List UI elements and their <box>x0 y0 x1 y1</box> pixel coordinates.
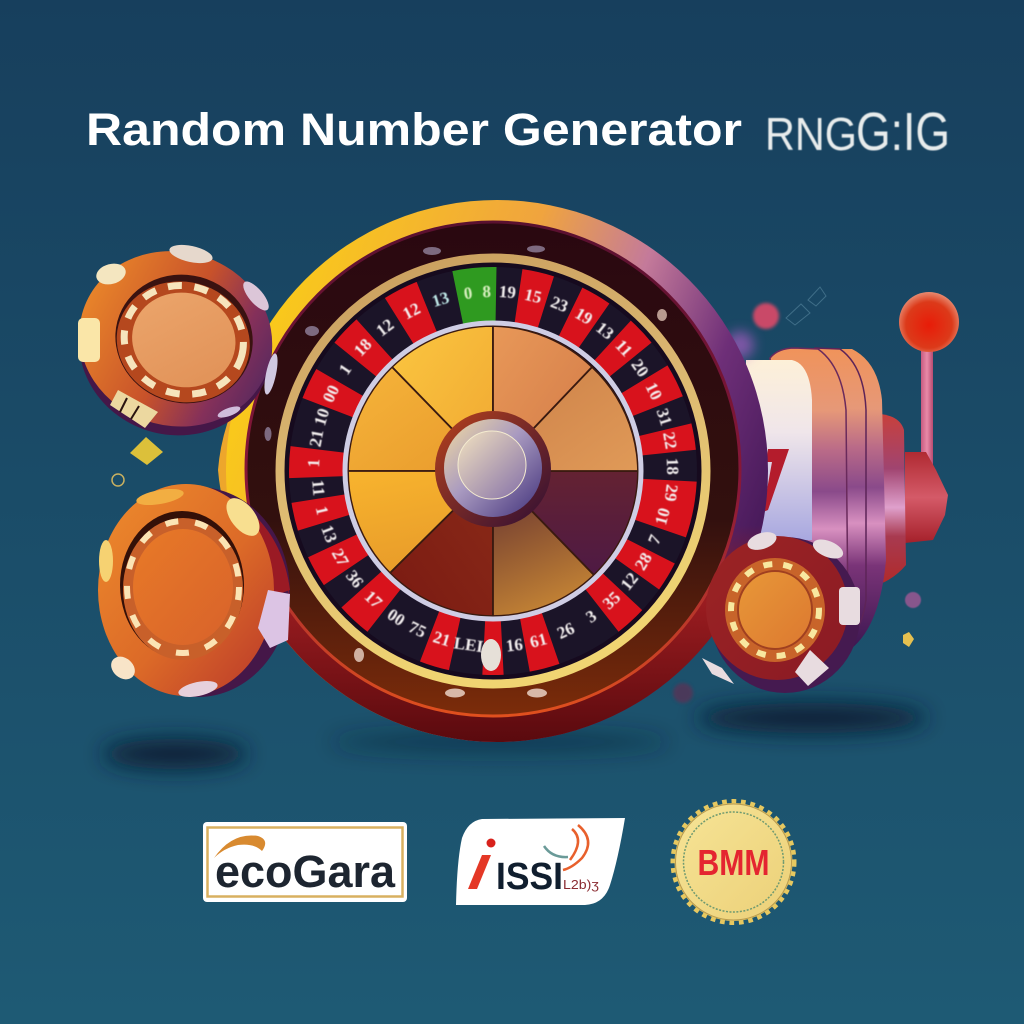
inner wheel sectors <box>348 326 638 616</box>
pocket numbers: 16 <box>505 635 524 656</box>
title: Random Number Generator <box>86 104 742 155</box>
pocket numbers: 10 <box>310 406 333 428</box>
pocket numbers: 20 <box>627 356 653 380</box>
pocket ring <box>285 263 701 679</box>
pocket numbers: 7 <box>644 531 665 547</box>
logo: ecoGara: ecoGara <box>215 846 396 897</box>
bowl studs <box>264 246 667 698</box>
pocket numbers: 22 <box>659 430 681 450</box>
logo: BMM gold seal <box>674 803 792 921</box>
pocket numbers: 75 <box>406 617 429 642</box>
pocket numbers: 31 <box>653 406 676 428</box>
pocket numbers: 3 <box>582 606 600 627</box>
chip body <box>98 484 290 697</box>
slot reel <box>744 360 812 540</box>
pocket numbers: 18 <box>350 335 376 360</box>
pocket numbers: 11 <box>308 479 329 497</box>
pocket numbers: 21 <box>306 428 327 448</box>
wheel outer rim <box>218 200 768 742</box>
roulette ball <box>481 639 501 671</box>
pocket numbers: 17 <box>361 587 386 612</box>
gold sparkle left <box>130 437 163 465</box>
pocket numbers: 61 <box>528 629 549 652</box>
pocket numbers <box>304 282 682 656</box>
pocket numbers: 12 <box>372 315 397 340</box>
chip body <box>57 230 293 457</box>
ring sparkle left <box>112 474 124 486</box>
logo: ecoGara <box>203 822 407 902</box>
chip: top left <box>57 230 293 457</box>
pocket numbers: 1 <box>335 360 355 378</box>
pocket numbers: 13 <box>317 523 341 545</box>
pocket numbers: 15 <box>523 285 543 307</box>
slot seven symbol <box>763 449 789 512</box>
ground shadows <box>103 703 927 769</box>
pocket numbers: 23 <box>548 292 571 316</box>
title badge: RNG glyphs: G:IG <box>856 102 950 162</box>
slot rear ring <box>840 349 886 650</box>
logo: red and navy badge: L2b)ʒ <box>563 877 599 892</box>
pocket numbers: 29 <box>661 483 682 502</box>
gold ring <box>280 258 706 684</box>
pocket numbers: 36 <box>342 567 367 592</box>
pocket numbers: 35 <box>599 588 624 613</box>
slot front ring <box>770 348 848 660</box>
slot side drum <box>880 414 906 584</box>
pocket numbers: 26 <box>554 619 577 643</box>
slot machine <box>744 292 959 660</box>
pocket numbers: 12 <box>617 569 642 594</box>
wheel hub <box>435 411 551 527</box>
chip edge notches <box>702 529 860 686</box>
pocket numbers: 12 <box>400 299 423 323</box>
pocket numbers: 19 <box>498 282 517 302</box>
pocket numbers: 1 <box>312 504 332 517</box>
lever <box>899 292 959 470</box>
pocket numbers: 19 <box>572 304 596 329</box>
pocket numbers: 10 <box>641 379 666 403</box>
pocket numbers: 11 <box>611 336 636 360</box>
pocket numbers: 00 <box>384 605 408 630</box>
pocket numbers: 1 <box>304 459 323 468</box>
logo: red and navy badge: ISSI <box>496 856 563 898</box>
pocket numbers: 27 <box>328 545 353 570</box>
title badge: RNG glyphs: RNG <box>765 108 857 160</box>
pocket numbers: LEI <box>453 633 485 656</box>
pocket numbers: 18 <box>663 458 682 475</box>
pocket numbers: 10 <box>651 506 674 527</box>
chip edge notches <box>78 242 280 428</box>
pocket numbers: 00 <box>319 382 343 405</box>
logo: BMM gold seal: BMM <box>698 842 770 883</box>
pocket numbers: 28 <box>631 549 656 574</box>
chip: lower right <box>702 529 860 693</box>
logo: red and navy badge <box>456 818 625 905</box>
roulette wheel <box>218 200 768 742</box>
glow sparkles right <box>673 287 921 703</box>
pocket numbers: 0 <box>462 283 474 303</box>
pocket numbers: 13 <box>430 288 451 311</box>
chip body <box>706 536 860 693</box>
slot side knob <box>905 452 948 543</box>
pocket numbers: 21 <box>431 627 453 650</box>
title badge: RNG glyphs <box>765 102 950 162</box>
chip edge notches <box>99 486 290 700</box>
wheel dark bowl <box>246 222 740 716</box>
inner silver ring <box>345 323 641 619</box>
pocket numbers: 8 <box>482 282 491 301</box>
chip: lower left <box>98 484 290 700</box>
pocket numbers: 13 <box>592 318 618 343</box>
